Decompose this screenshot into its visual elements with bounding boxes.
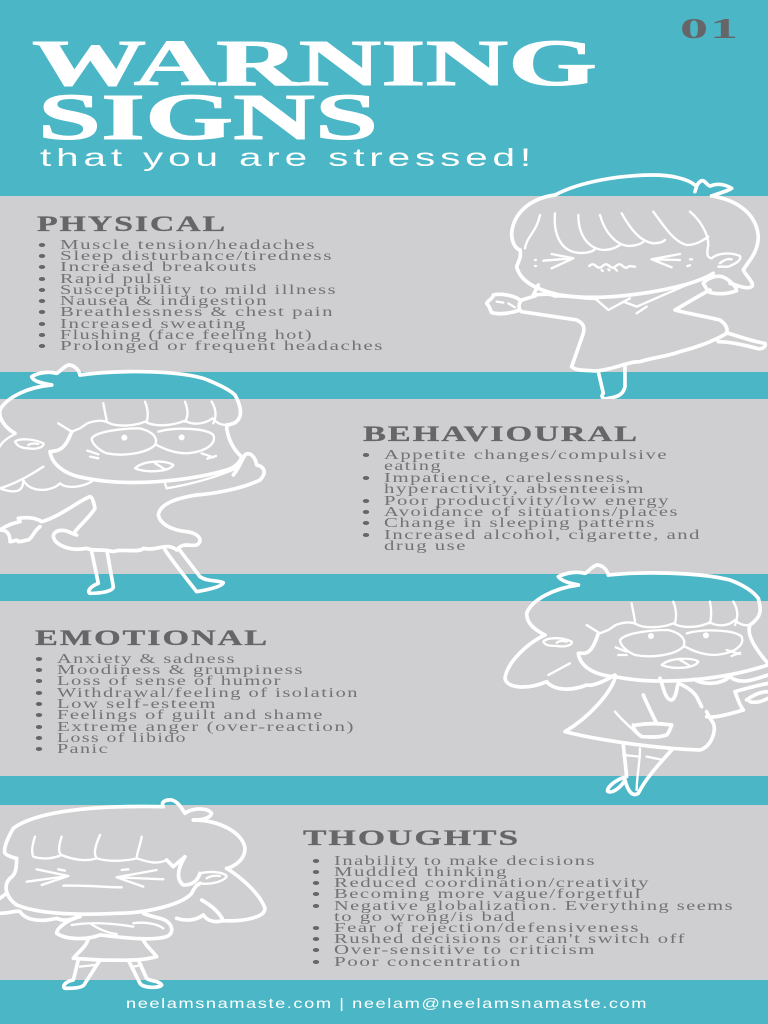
heading: behavioural: BEHAVIOURAL xyxy=(363,421,639,446)
list: behavioural signs: drug use xyxy=(384,538,467,553)
list: thoughts signs: Over-sensitive to criticism xyxy=(334,942,596,957)
list: physical signs: Flushing (face feeling hot) xyxy=(60,327,313,342)
title: WARNING xyxy=(32,27,597,100)
list: thoughts signs: Rushed decisions or can't switch off xyxy=(334,931,686,946)
heading: physical: PHYSICAL xyxy=(37,211,227,236)
list: behavioural signs: Avoidance of situations/places xyxy=(384,504,679,519)
title xyxy=(32,27,597,154)
panel: emotional xyxy=(0,565,768,795)
subtitle: that you are stressed! xyxy=(40,144,536,172)
list: behavioural signs: hyperactivity, absenteeism xyxy=(384,481,645,496)
list: thoughts signs: Fear of rejection/defensiveness xyxy=(334,920,640,935)
list: physical signs: Increased sweating xyxy=(60,316,247,331)
list: thoughts signs: Poor concentration xyxy=(334,954,522,969)
list: physical signs: Sleep disturbance/tiredness xyxy=(60,248,333,263)
list: thoughts signs: Becoming more vague/forgetful xyxy=(334,886,642,901)
list: physical signs xyxy=(39,237,384,353)
list: emotional signs: Moodiness & grumpiness xyxy=(57,662,304,677)
list: thoughts signs: to go wrong/is bad xyxy=(334,909,516,924)
list: emotional signs: Low self-esteem xyxy=(57,696,217,711)
list: behavioural signs: Poor productivity/low energy xyxy=(384,493,670,508)
list: emotional signs: Withdrawal/feeling of isolation xyxy=(57,685,359,700)
list: emotional signs: Feelings of guilt and shame xyxy=(57,707,324,722)
list: thoughts signs: Muddled thinking xyxy=(334,864,508,879)
list: emotional signs: Loss of sense of humor xyxy=(57,673,282,688)
panel: thoughts xyxy=(0,800,768,988)
list: behavioural signs xyxy=(363,447,701,553)
list: thoughts signs: Reduced coordination/creativity xyxy=(334,875,650,890)
title: SIGNS xyxy=(38,81,378,154)
list: physical signs: Breathlessness & chest pain xyxy=(60,304,334,319)
list: behavioural signs: eating xyxy=(384,458,442,473)
list: thoughts signs: Inability to make decisions xyxy=(334,853,596,868)
footer contact line: neelamsnamaste.com | neelam@neelamsnamaste.com xyxy=(126,995,648,1011)
panel: behavioural xyxy=(0,365,768,593)
list: thoughts signs xyxy=(313,853,734,969)
character: girl wincing, arms crossed xyxy=(0,800,265,988)
list: physical signs: Rapid pulse xyxy=(60,271,173,286)
list: behavioural signs: Change in sleeping patterns xyxy=(384,515,656,530)
character: girl worried, hand raised xyxy=(0,365,264,593)
list: physical signs: Nausea & indigestion xyxy=(60,293,268,308)
character: girl wincing, arms out xyxy=(487,175,765,399)
list: behavioural signs: Impatience, carelessness, xyxy=(384,470,632,485)
panel: physical xyxy=(0,175,768,399)
list: emotional signs: Loss of libido xyxy=(57,730,187,745)
list: emotional signs xyxy=(36,651,359,756)
list: physical signs: Prolonged or frequent headaches xyxy=(60,338,384,353)
list: emotional signs: Anxiety & sadness xyxy=(57,651,236,666)
list: behavioural signs: Appetite changes/compulsive xyxy=(384,447,668,462)
list: thoughts signs: Negative globalization. Everything seems xyxy=(334,898,734,913)
list: emotional signs: Extreme anger (over-reaction) xyxy=(57,719,355,734)
list: emotional signs: Panic xyxy=(57,741,109,756)
heading: thoughts: THOUGHTS xyxy=(303,825,520,850)
list: physical signs: Muscle tension/headaches xyxy=(60,237,316,252)
character: girl worried, pointing xyxy=(505,565,768,795)
list: behavioural signs: Increased alcohol, cigarette, and xyxy=(384,527,701,542)
list: physical signs: Increased breakouts xyxy=(60,259,258,274)
page number: 01 xyxy=(680,13,740,45)
heading: emotional: EMOTIONAL xyxy=(35,625,269,650)
list: physical signs: Susceptibility to mild illness xyxy=(60,282,337,297)
